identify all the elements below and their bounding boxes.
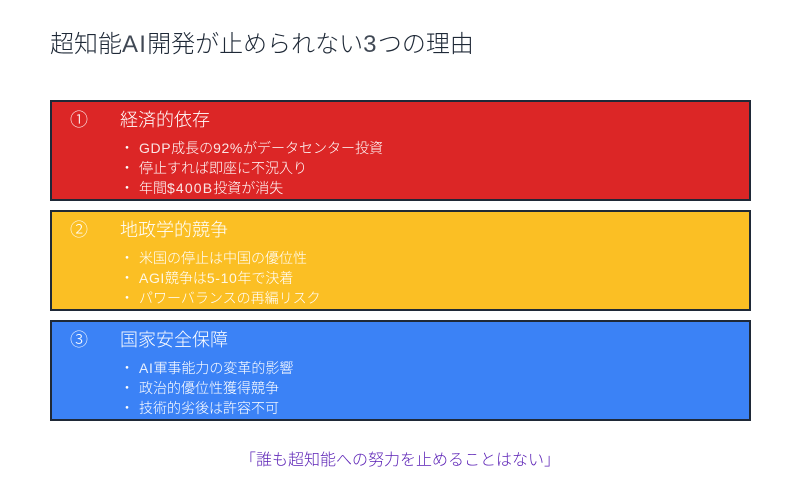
panel: economic dependence <box>50 100 751 201</box>
bullet 1: ・ <box>120 250 134 266</box>
bullet 2: ・ <box>120 380 134 396</box>
bullet 1: AI軍事能力の変革的影響 <box>139 360 293 376</box>
heading: national security: 国家安全保障 <box>120 330 228 350</box>
number 1: ① <box>70 110 88 130</box>
bullet 2: 停止すれば即座に不況入り <box>139 160 307 176</box>
closing quote: 「誰も超知能への努力を止めることはない」 <box>240 452 560 469</box>
bullet 1: ・ <box>120 140 134 156</box>
bullet 3: 年間$400B投資が消失 <box>139 180 283 196</box>
bullet 3: ・ <box>120 180 134 196</box>
bullet 1: GDP成長の92%がデータセンター投資 <box>139 140 383 156</box>
bullet 2: ・ <box>120 270 134 286</box>
bullet 3: ・ <box>120 400 134 416</box>
panel: geopolitical competition <box>50 210 751 311</box>
heading: geopolitical competition: 地政学的競争 <box>120 220 228 240</box>
bullet 3: ・ <box>120 290 134 306</box>
panel: national security <box>50 320 751 421</box>
bullet 3: 技術的劣後は許容不可 <box>139 400 279 416</box>
bullet 2: ・ <box>120 160 134 176</box>
bullet 3: パワーバランスの再編リスク <box>139 290 321 306</box>
bullet 2: 政治的優位性獲得競争 <box>139 380 279 396</box>
bullet 1: ・ <box>120 360 134 376</box>
number 3: ③ <box>70 330 88 350</box>
number 2: ② <box>70 220 88 240</box>
title: 超知能AI開発が止められない3つの理由 <box>50 31 474 58</box>
bullet 1: 米国の停止は中国の優位性 <box>139 250 307 266</box>
heading: economic dependence: 経済的依存 <box>120 110 210 130</box>
bullet 2: AGI競争は5-10年で決着 <box>139 270 293 286</box>
